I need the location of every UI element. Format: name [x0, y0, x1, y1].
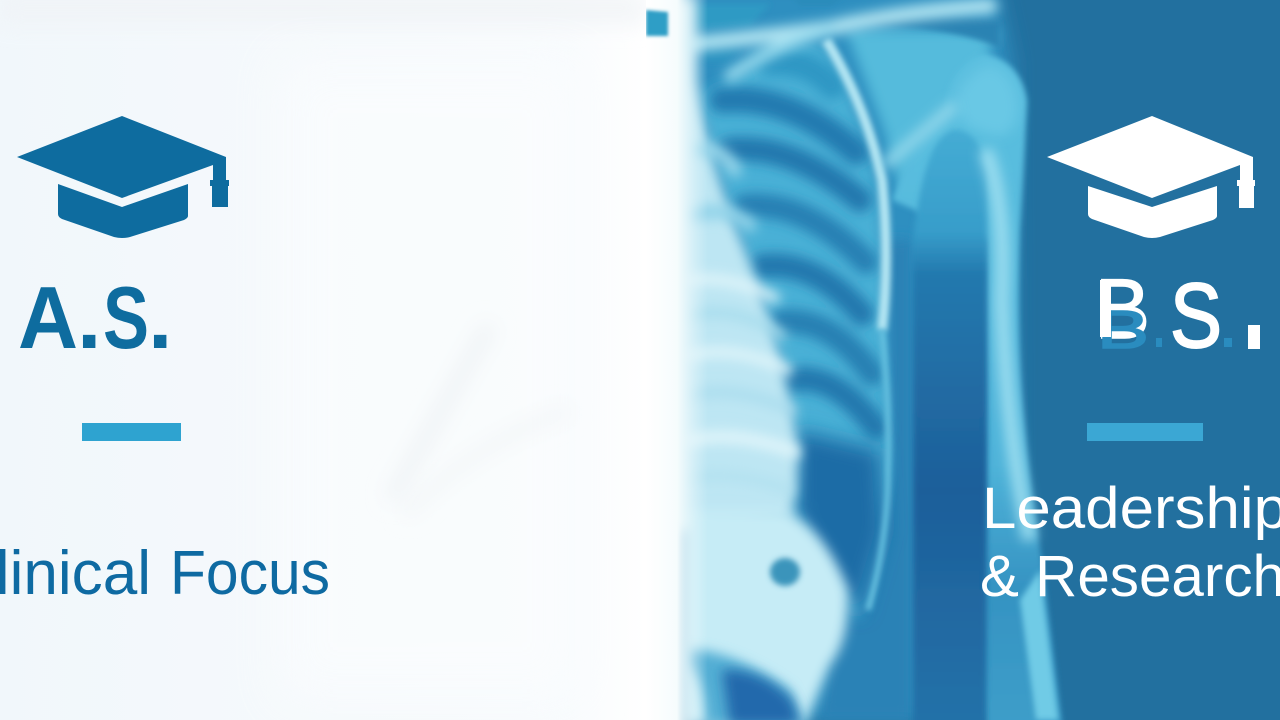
panel: B.S. leadership and research — [646, 0, 1280, 720]
heading: B.S. — [1100, 278, 1260, 349]
text: Clinical Focus — [0, 539, 330, 608]
heading: A.S. — [18, 268, 172, 367]
heading: A.S.: . — [77, 268, 101, 367]
panel: A.S. clinical focus — [0, 0, 646, 720]
text: Leadership & Research — [982, 486, 1280, 596]
heading: A.S.: . — [148, 268, 172, 367]
text: Clinical Focus: Focus — [170, 539, 330, 608]
illustration: chest x-ray — [646, 0, 1064, 720]
heading: B.S.: B — [1095, 262, 1150, 356]
heading: A.S.: S — [103, 268, 149, 367]
clavicle and upper ribs — [690, 6, 990, 76]
icon: graduation cap — [1047, 116, 1255, 238]
rib arc — [826, 40, 886, 330]
soft body tone — [690, 0, 1018, 720]
white spine glow — [646, 0, 708, 720]
humerus — [892, 53, 1064, 720]
text: Leadership & Research: & Research — [980, 544, 1280, 609]
diaphragm — [684, 510, 848, 720]
upper chest and scapula — [846, 30, 1000, 190]
medullary canal — [913, 130, 988, 720]
heading: B.S.: S — [1170, 265, 1222, 367]
heading: B.S.: B — [1097, 300, 1149, 360]
text: Leadership & Research: Leadership — [982, 476, 1280, 541]
icon: graduation cap — [17, 116, 229, 238]
dark rib gaps — [770, 62, 832, 86]
divider bar — [82, 423, 181, 441]
heading: A.S.: A — [18, 268, 78, 367]
divider bar — [1087, 423, 1203, 441]
spine and left ribs — [678, 0, 807, 530]
lung — [700, 44, 888, 620]
